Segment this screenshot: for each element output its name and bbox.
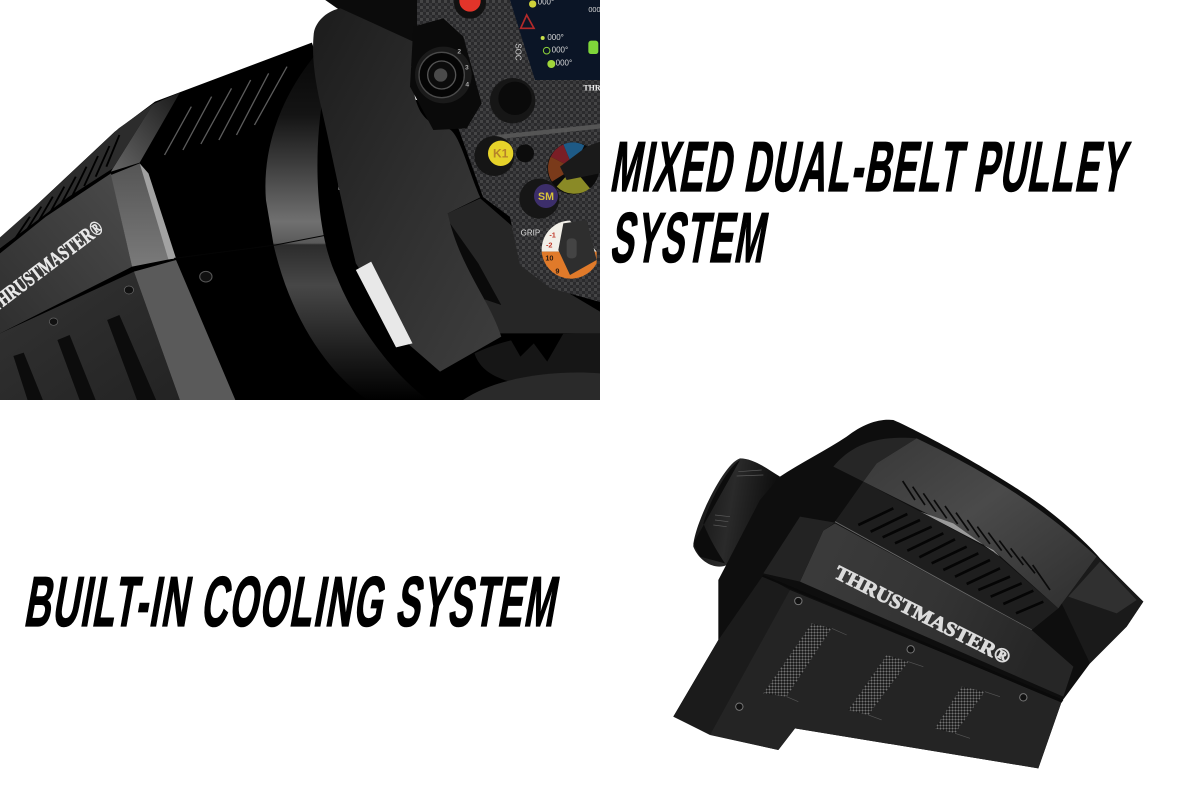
display screen <box>510 0 601 80</box>
grip dial: -1 <box>549 230 556 239</box>
soc label: SOC <box>513 43 522 61</box>
rotary encoder: 3 <box>465 64 469 71</box>
display screen: 000° <box>556 58 572 67</box>
wheel controls <box>410 0 601 279</box>
k1 button: K1 <box>493 147 509 161</box>
display screen: 000° <box>552 46 568 55</box>
vent plate <box>835 482 1058 630</box>
heading: built-in cooling system: BUILT-IN COOLING SYSTEM <box>20 562 566 642</box>
rotary encoder <box>410 18 482 130</box>
grille 2 <box>848 655 908 715</box>
sm button <box>519 179 559 219</box>
ridge <box>497 124 600 139</box>
display screen: 000° <box>547 33 564 42</box>
logo on wheel: THR <box>583 84 601 93</box>
side logo panel <box>800 523 1073 697</box>
wheel grip <box>313 8 501 372</box>
k1 button <box>474 136 514 176</box>
rotary encoder: 4 <box>465 82 469 89</box>
screws <box>736 597 1027 710</box>
hood slats <box>903 481 1050 590</box>
side logo text: THRUSTMASTER® <box>831 562 1014 669</box>
lower plate with grilles <box>673 575 1063 768</box>
rotary encoder: 2 <box>457 48 461 55</box>
grip dial: 9 <box>555 266 559 275</box>
heading: mixed dual-belt pulley system <box>606 127 1136 278</box>
grip label: GRIP <box>521 228 540 237</box>
sm button: SM <box>538 191 554 203</box>
glossy motor ring <box>174 0 600 400</box>
black knob <box>490 78 535 123</box>
photo: wheel base side view <box>673 420 1143 768</box>
nose section <box>1058 557 1143 663</box>
carbon fibre wheel panel <box>417 0 600 302</box>
grip dial: 10 <box>545 254 553 263</box>
grip dial: -2 <box>546 240 553 249</box>
display screen: 000 <box>588 5 601 14</box>
grip dial <box>542 220 597 279</box>
vent plate slats <box>858 508 1043 613</box>
multi-colour dial <box>547 142 600 194</box>
red button <box>454 0 486 19</box>
motor base body <box>0 42 368 400</box>
housing silhouette <box>673 420 1143 768</box>
grille 1 <box>763 623 832 697</box>
heading: mixed dual-belt pulley system: SYSTEM <box>606 198 775 278</box>
grille 3 <box>935 687 985 733</box>
connector shaft <box>693 458 780 567</box>
small black button <box>516 144 534 162</box>
photo: wheel base with steering wheel close-up <box>0 0 601 400</box>
top hood panel <box>863 438 1097 608</box>
